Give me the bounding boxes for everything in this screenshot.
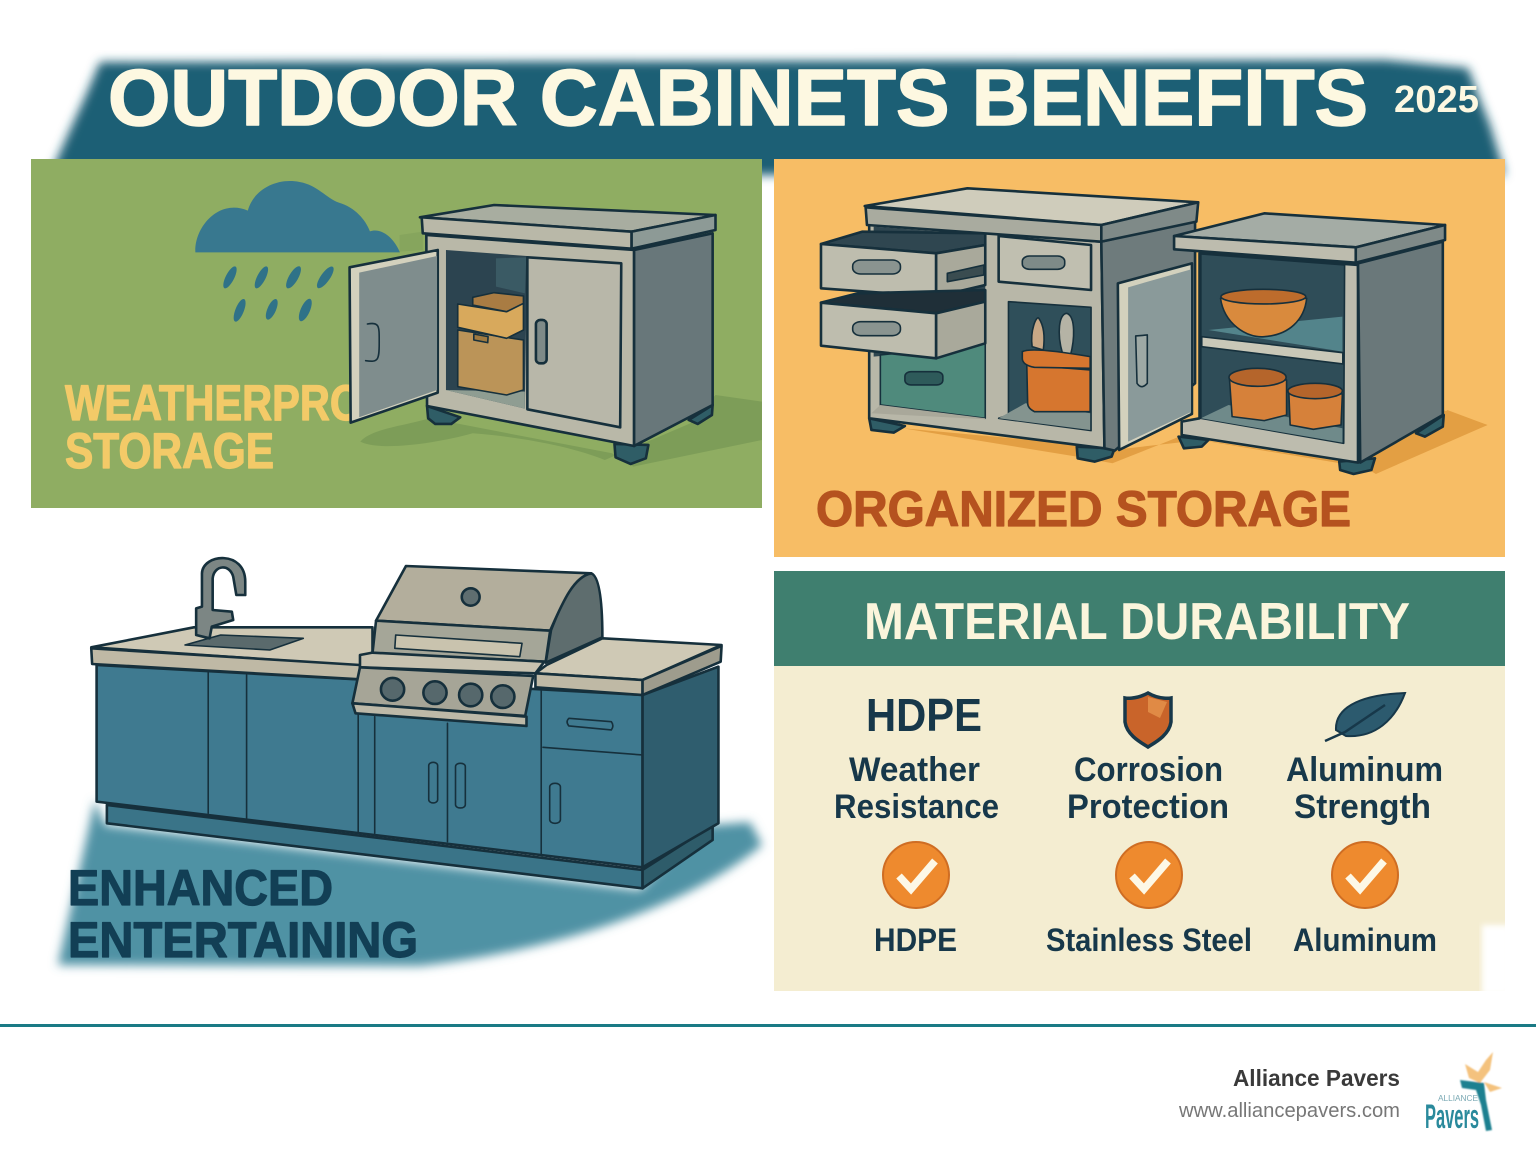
column: aluminum strength: Strength [1294,788,1431,826]
year label: 2025 [1394,79,1479,121]
icon: Alliance Pavers logo: Pavers [1425,1098,1479,1136]
icon: check stainless steel [1116,842,1182,908]
column: aluminum strength [1286,751,1443,826]
heading: enhanced entertaining [68,860,418,968]
column: corrosion protection: Corrosion [1074,751,1223,789]
bowl [1221,289,1307,337]
material labels: Aluminum [1293,922,1437,958]
title text: OUTDOOR CABINETS BENEFITS [108,53,1368,142]
footer brand name: Alliance Pavers [1233,1065,1400,1091]
heading: material durability: MATERIAL DURABILITY [864,593,1410,651]
header bar [774,571,1505,666]
column: corrosion protection: Protection [1067,788,1229,826]
panel: enhanced entertaining [58,558,762,968]
column: HDPE weather resistance: Weather [849,751,980,789]
panel: material durability [774,571,1510,995]
material labels [874,922,1437,958]
icon: Alliance Pavers logo [1425,1052,1502,1136]
heading: enhanced entertaining: ENTERTAINING [68,912,418,968]
title banner [50,53,1505,175]
open door [350,250,438,423]
heading: weatherproof storage: STORAGE [65,423,274,479]
main cabinet body [869,220,1195,451]
drawers [821,232,985,358]
material labels: HDPE [874,922,957,958]
sink and faucet [185,558,303,650]
icon: check HDPE [883,842,949,908]
material labels: Stainless Steel [1046,922,1252,958]
cabinet [350,205,762,467]
illustration: rain cloud and open cabinet [195,181,762,467]
column: corrosion protection [1067,751,1229,826]
icon: shield [1125,693,1171,747]
heading: organized storage: ORGANIZED STORAGE [816,481,1351,537]
column: HDPE weather resistance: Resistance [834,788,999,826]
illustration: outdoor kitchen with grill [91,558,722,888]
panel: weatherproof storage [31,159,762,508]
footer divider [0,1024,1536,1027]
countertop [91,627,722,695]
icon: rain cloud [195,181,400,323]
heading: enhanced entertaining: ENHANCED [68,860,333,916]
heading: weatherproof storage: WEATHERPROOF [65,375,420,431]
icon: Alliance Pavers logo: ALLIANCE [1438,1094,1478,1103]
open door [1118,263,1192,450]
column: aluminum strength: Aluminum [1286,751,1443,789]
footer website: www.alliancepavers.com [1178,1100,1400,1122]
column: HDPE weather resistance [834,689,999,826]
second cabinet [1174,213,1445,474]
icon: leaf [1325,693,1405,741]
jars [1229,368,1342,429]
illustration: two cabinets with drawers [821,188,1487,474]
icon: check aluminum [1332,842,1398,908]
heading: weatherproof storage [64,384,350,470]
panel: organized storage [774,159,1505,557]
column: HDPE weather resistance: HDPE [866,689,982,741]
bucket with utensils [1022,313,1090,412]
cardboard box [458,293,523,395]
grill [352,566,602,726]
